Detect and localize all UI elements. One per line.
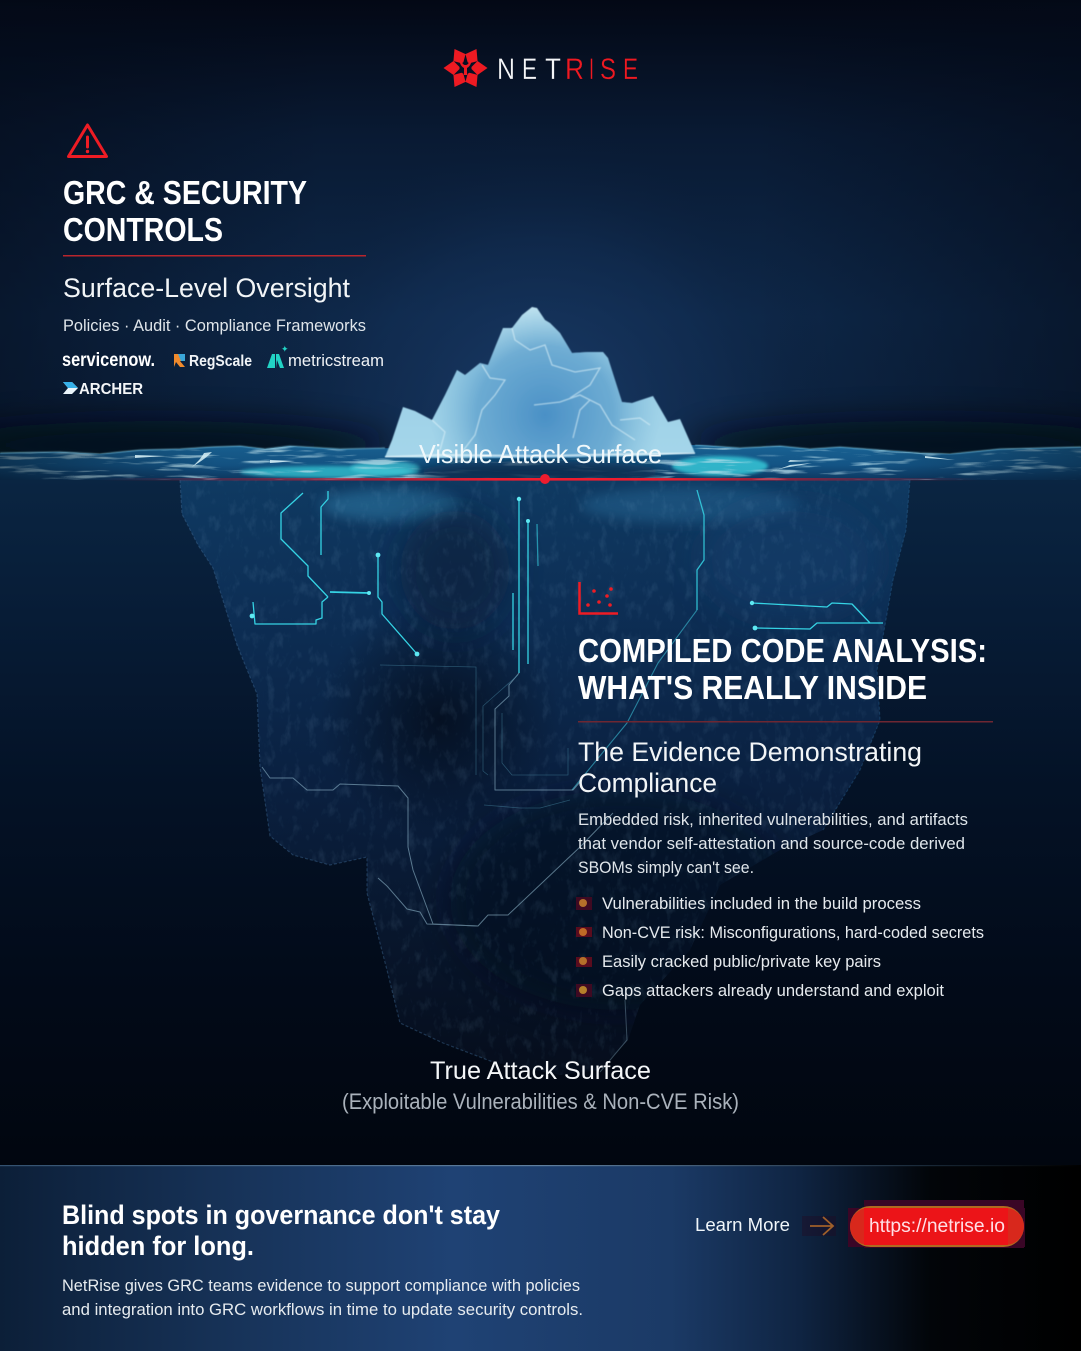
logo: Archer: ARCHER (79, 381, 143, 398)
arrow (802, 1216, 836, 1236)
label: true attack surface: True Attack Surface (430, 1057, 651, 1085)
heading: WHAT'S REALLY INSIDE (578, 669, 927, 706)
descriptor: Policies · Audit · Compliance Frameworks (63, 316, 366, 335)
submerged iceberg (170, 478, 920, 1088)
icon: warning triangle (68, 125, 106, 156)
subheading: Surface-Level Oversight (63, 273, 350, 303)
logo: metricstream: metricstream (288, 351, 384, 370)
logo wordmark: E (522, 53, 537, 86)
body text: that vendor self-attestation and source-code derived (578, 834, 965, 853)
logo: servicenow: servicenow. (62, 350, 155, 371)
body text (578, 810, 968, 877)
logo wordmark: I (589, 53, 594, 86)
button (848, 1200, 1025, 1248)
panel: GRC and security controls (62, 125, 384, 398)
waterline marker (100, 474, 980, 484)
button: https://netrise.io (869, 1216, 1005, 1237)
logo: RegScale: RegScale (189, 353, 252, 370)
logo wordmark: R (565, 53, 584, 86)
learn more label: Learn More (695, 1215, 790, 1235)
bullet list (576, 894, 984, 1000)
logo wordmark: T (545, 53, 561, 86)
heading: COMPILED CODE ANALYSIS: (578, 632, 987, 669)
body text: SBOMs simply can't see. (578, 858, 754, 877)
logo wordmark: S (600, 53, 616, 86)
label: true attack surface: (Exploitable Vulnerabilities & Non-CVE Risk) (342, 1089, 739, 1114)
circuit lines (250, 490, 883, 1072)
logo: metricstream: ✦ (281, 344, 289, 354)
label: visible attack surface: Visible Attack Surface (419, 439, 662, 469)
bullet 4: Gaps attackers already understand and exploit (602, 981, 944, 1000)
banner heading: Blind spots in governance don't stay (62, 1200, 500, 1230)
logo wordmark (497, 53, 638, 86)
logo wordmark: E (623, 53, 638, 86)
panel: compiled code analysis (576, 582, 993, 1000)
logo: metricstream (267, 344, 384, 370)
subheading (578, 737, 922, 798)
subheading: The Evidence Demonstrating (578, 737, 922, 767)
heading (578, 632, 987, 706)
bullet 3: Easily cracked public/private key pairs (602, 952, 881, 971)
bullet 2: Non-CVE risk: Misconfigurations, hard-coded secrets (602, 923, 984, 942)
banner text: and integration into GRC workflows in time to update security controls. (62, 1300, 583, 1319)
heading (63, 174, 307, 248)
banner heading (62, 1200, 500, 1261)
iceberg tip (385, 307, 695, 458)
panel: call to action banner (0, 1165, 1081, 1351)
banner heading: hidden for long. (62, 1231, 254, 1261)
logo mark (444, 45, 488, 91)
sea surface (0, 444, 1081, 483)
heading: CONTROLS (63, 211, 223, 248)
banner text: NetRise gives GRC teams evidence to support compliance with policies (62, 1276, 580, 1295)
banner text (62, 1276, 583, 1319)
icon: scatter chart (580, 582, 618, 614)
logo wordmark: N (497, 53, 515, 86)
partner logos (62, 344, 384, 398)
label: true attack surface (342, 1057, 739, 1114)
heading: GRC & SECURITY (63, 174, 307, 211)
logo (444, 45, 638, 91)
bullet 1: Vulnerabilities included in the build process (602, 894, 921, 913)
body text: Embedded risk, inherited vulnerabilities, and artifacts (578, 810, 968, 829)
subheading: Compliance (578, 768, 717, 798)
